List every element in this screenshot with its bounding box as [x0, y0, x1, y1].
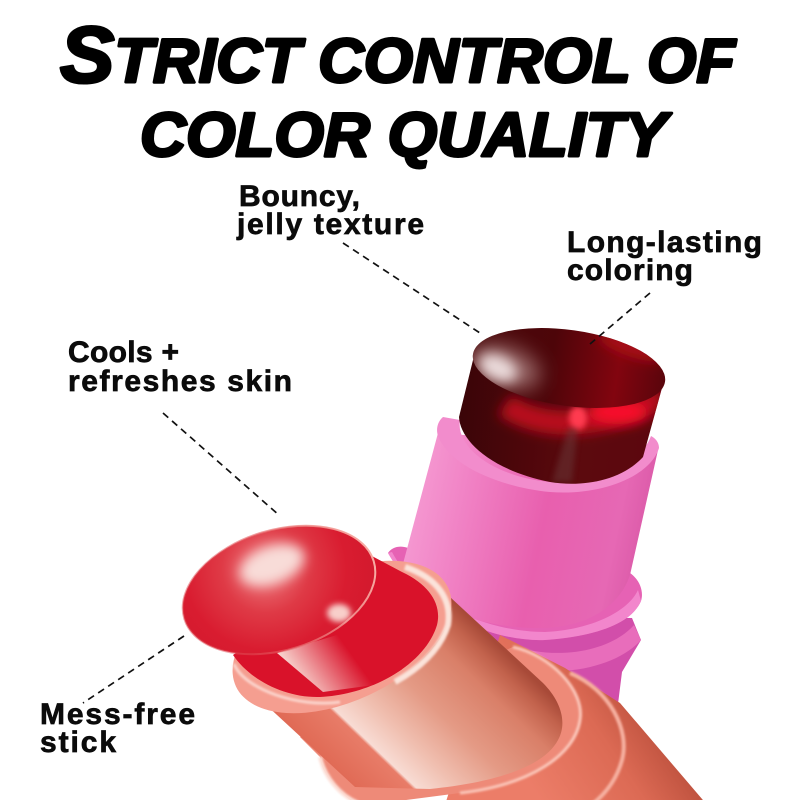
- dashed leader: long-lasting: [590, 293, 650, 344]
- title: [60, 10, 737, 170]
- label: bouncy jelly texture: Bouncy,: [239, 180, 360, 213]
- label: long-lasting coloring: Long-lasting: [567, 226, 762, 259]
- label: bouncy jelly texture: jelly texture: [236, 208, 424, 241]
- red jelly body: [233, 556, 438, 697]
- coral second ring: [300, 647, 580, 800]
- label: long-lasting coloring: coloring: [567, 254, 693, 287]
- label: mess-free stick: [40, 698, 195, 759]
- pink lip stick: [388, 320, 680, 712]
- tube rim: [209, 530, 475, 744]
- label: cools refreshes skin: Cools +: [68, 336, 179, 369]
- label: long-lasting coloring: [567, 226, 762, 287]
- label: cools refreshes skin: [68, 336, 292, 398]
- coral lip stick: [182, 524, 703, 800]
- label: mess-free stick: Mess-free: [40, 698, 195, 731]
- pink ring: [388, 547, 642, 640]
- label: cools refreshes skin: refreshes skin: [68, 365, 292, 398]
- title: STRICT CONTROL OF: [60, 10, 737, 99]
- dark jelly body: [459, 360, 662, 484]
- pink tube rim: [437, 417, 659, 493]
- red jelly top: [182, 524, 376, 656]
- coral far section: [440, 635, 720, 800]
- title: COLOR QUALITY: [140, 101, 673, 170]
- dashed leader: cools: [163, 413, 280, 516]
- label: bouncy jelly texture: [236, 180, 424, 241]
- jelly top surface: [472, 328, 666, 408]
- dashed leader: mess-free: [83, 636, 184, 703]
- label: mess-free stick: stick: [40, 726, 116, 759]
- pink lower base: [470, 615, 641, 712]
- dashed leader: bouncy: [343, 243, 483, 335]
- coral tube: [250, 597, 562, 789]
- pink tube: [400, 433, 658, 628]
